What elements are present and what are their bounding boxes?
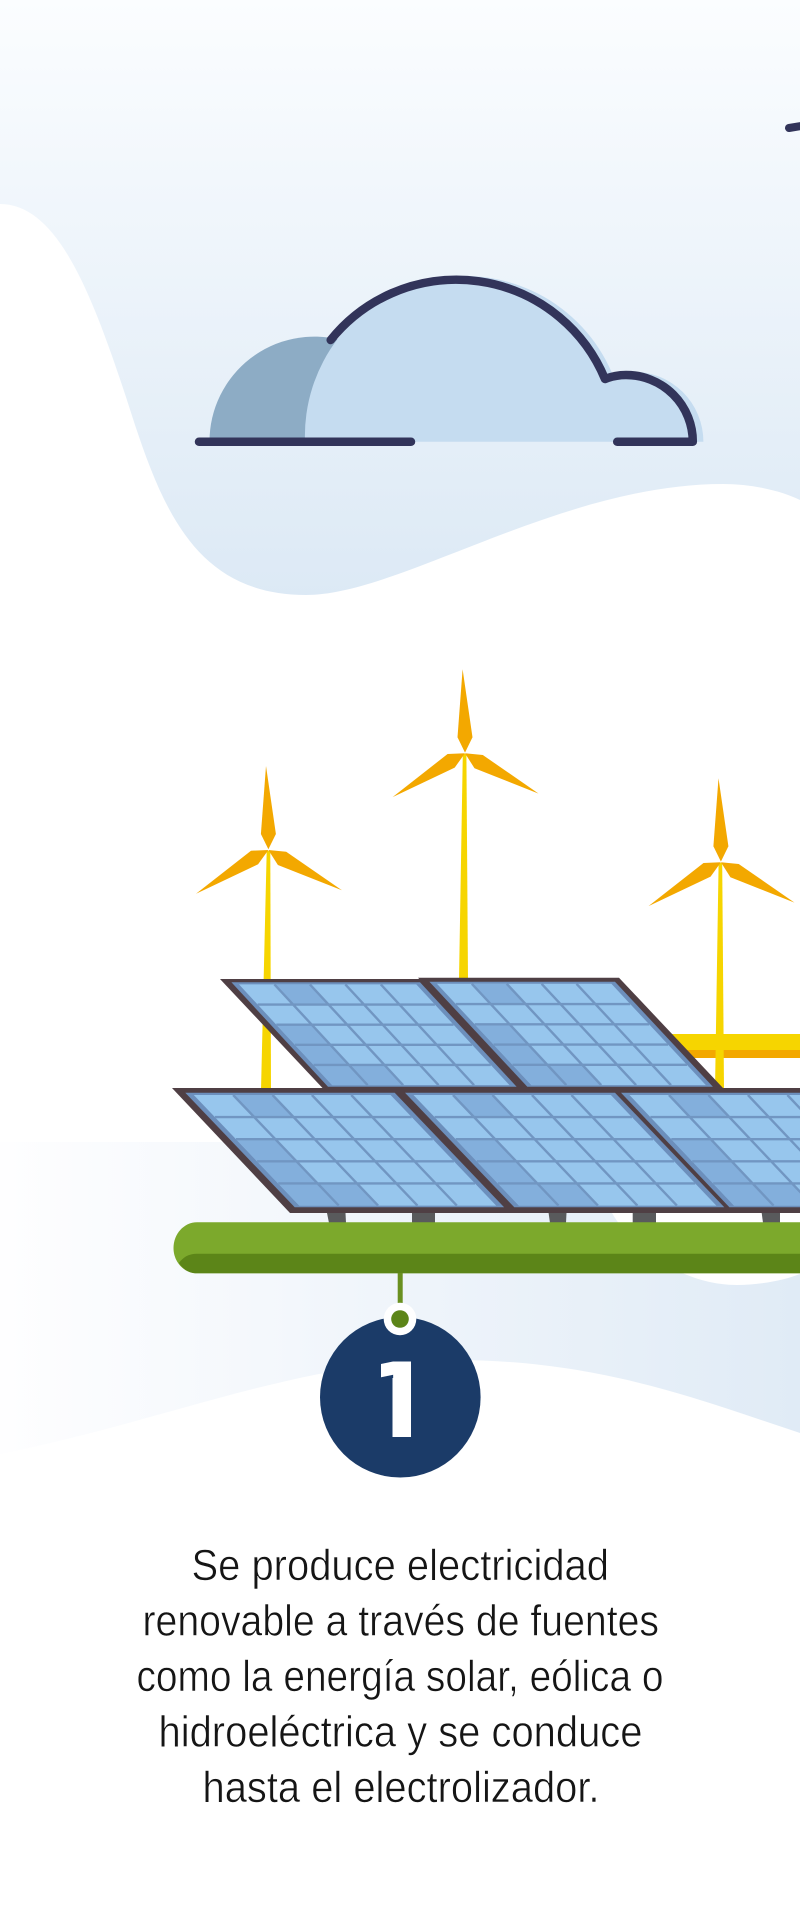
lower panel row [172, 1088, 800, 1213]
panel support legs [327, 1213, 780, 1223]
upper panel right [418, 978, 723, 1088]
turbine right [648, 778, 794, 1090]
cloud outline [199, 280, 693, 442]
description text: hidroeléctrica y se conduce [158, 1708, 642, 1757]
turbine left [196, 766, 342, 1090]
power cable bar [660, 1034, 800, 1058]
badge number: 1 [364, 1342, 436, 1462]
sky background wave [0, 0, 800, 595]
description text: Se produce electricidad [192, 1541, 609, 1590]
number badge [320, 1273, 481, 1477]
connector stem [398, 1273, 403, 1319]
description text: hasta el electrolizador. [202, 1763, 600, 1812]
lower background wave band [0, 1142, 800, 1454]
partial cable stroke at top right [789, 126, 800, 128]
icon: cloud [199, 276, 703, 442]
description text [136, 1541, 664, 1812]
turbine centre [393, 669, 539, 980]
upper panel left [220, 979, 535, 1088]
description text: como la energía solar, eólica o [136, 1652, 664, 1701]
description text: renovable a través de fuentes [142, 1597, 659, 1646]
badge circle [320, 1317, 481, 1477]
badge number [381, 1362, 411, 1437]
connector dot [384, 1303, 416, 1335]
wind turbines [196, 669, 800, 1090]
solar panels [172, 978, 800, 1223]
green ground bar [174, 1222, 800, 1273]
cloud back bump [209, 337, 341, 442]
cloud body [305, 276, 703, 442]
